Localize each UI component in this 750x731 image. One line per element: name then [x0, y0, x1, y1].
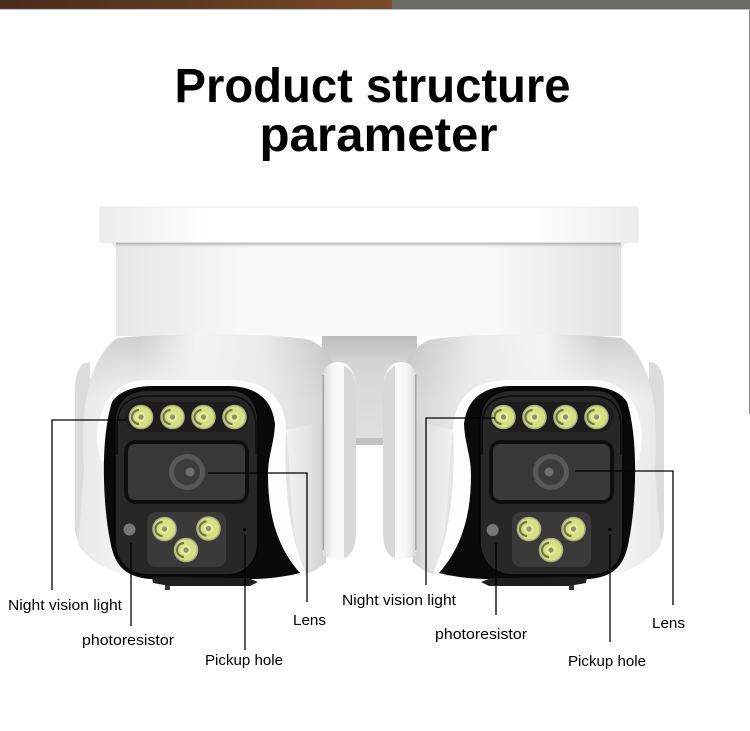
title: Product structure — [174, 60, 570, 113]
left camera — [75, 334, 356, 590]
left camera face plate — [115, 390, 258, 575]
labels right — [342, 593, 685, 670]
left lens — [169, 454, 205, 490]
title: parameter — [260, 109, 498, 162]
labels right: Pickup hole — [568, 654, 646, 670]
callout lines — [52, 418, 673, 650]
labels right: photoresistor — [435, 627, 527, 643]
right edge line — [749, 9, 750, 414]
left camera housing — [75, 334, 356, 590]
labels right: Lens — [652, 616, 685, 632]
left night vision LEDs — [129, 405, 247, 562]
right photoresistor — [487, 524, 499, 536]
ceiling mount base — [100, 207, 638, 445]
title — [174, 60, 570, 162]
labels left: Pickup hole — [205, 653, 283, 669]
labels left: photoresistor — [82, 633, 174, 649]
top banner strip — [0, 0, 750, 10]
left photoresistor — [124, 524, 136, 536]
right camera housing — [383, 334, 664, 590]
right night vision LEDs — [491, 405, 609, 562]
right pickup hole — [608, 528, 612, 531]
left pickup hole — [243, 528, 246, 531]
labels right: Night vision light — [342, 593, 456, 609]
labels left: Lens — [293, 613, 326, 629]
right lens — [533, 454, 569, 490]
right camera — [383, 334, 664, 590]
right camera face plate — [480, 390, 623, 575]
labels left: Night vision light — [8, 598, 122, 614]
labels left — [8, 598, 326, 669]
